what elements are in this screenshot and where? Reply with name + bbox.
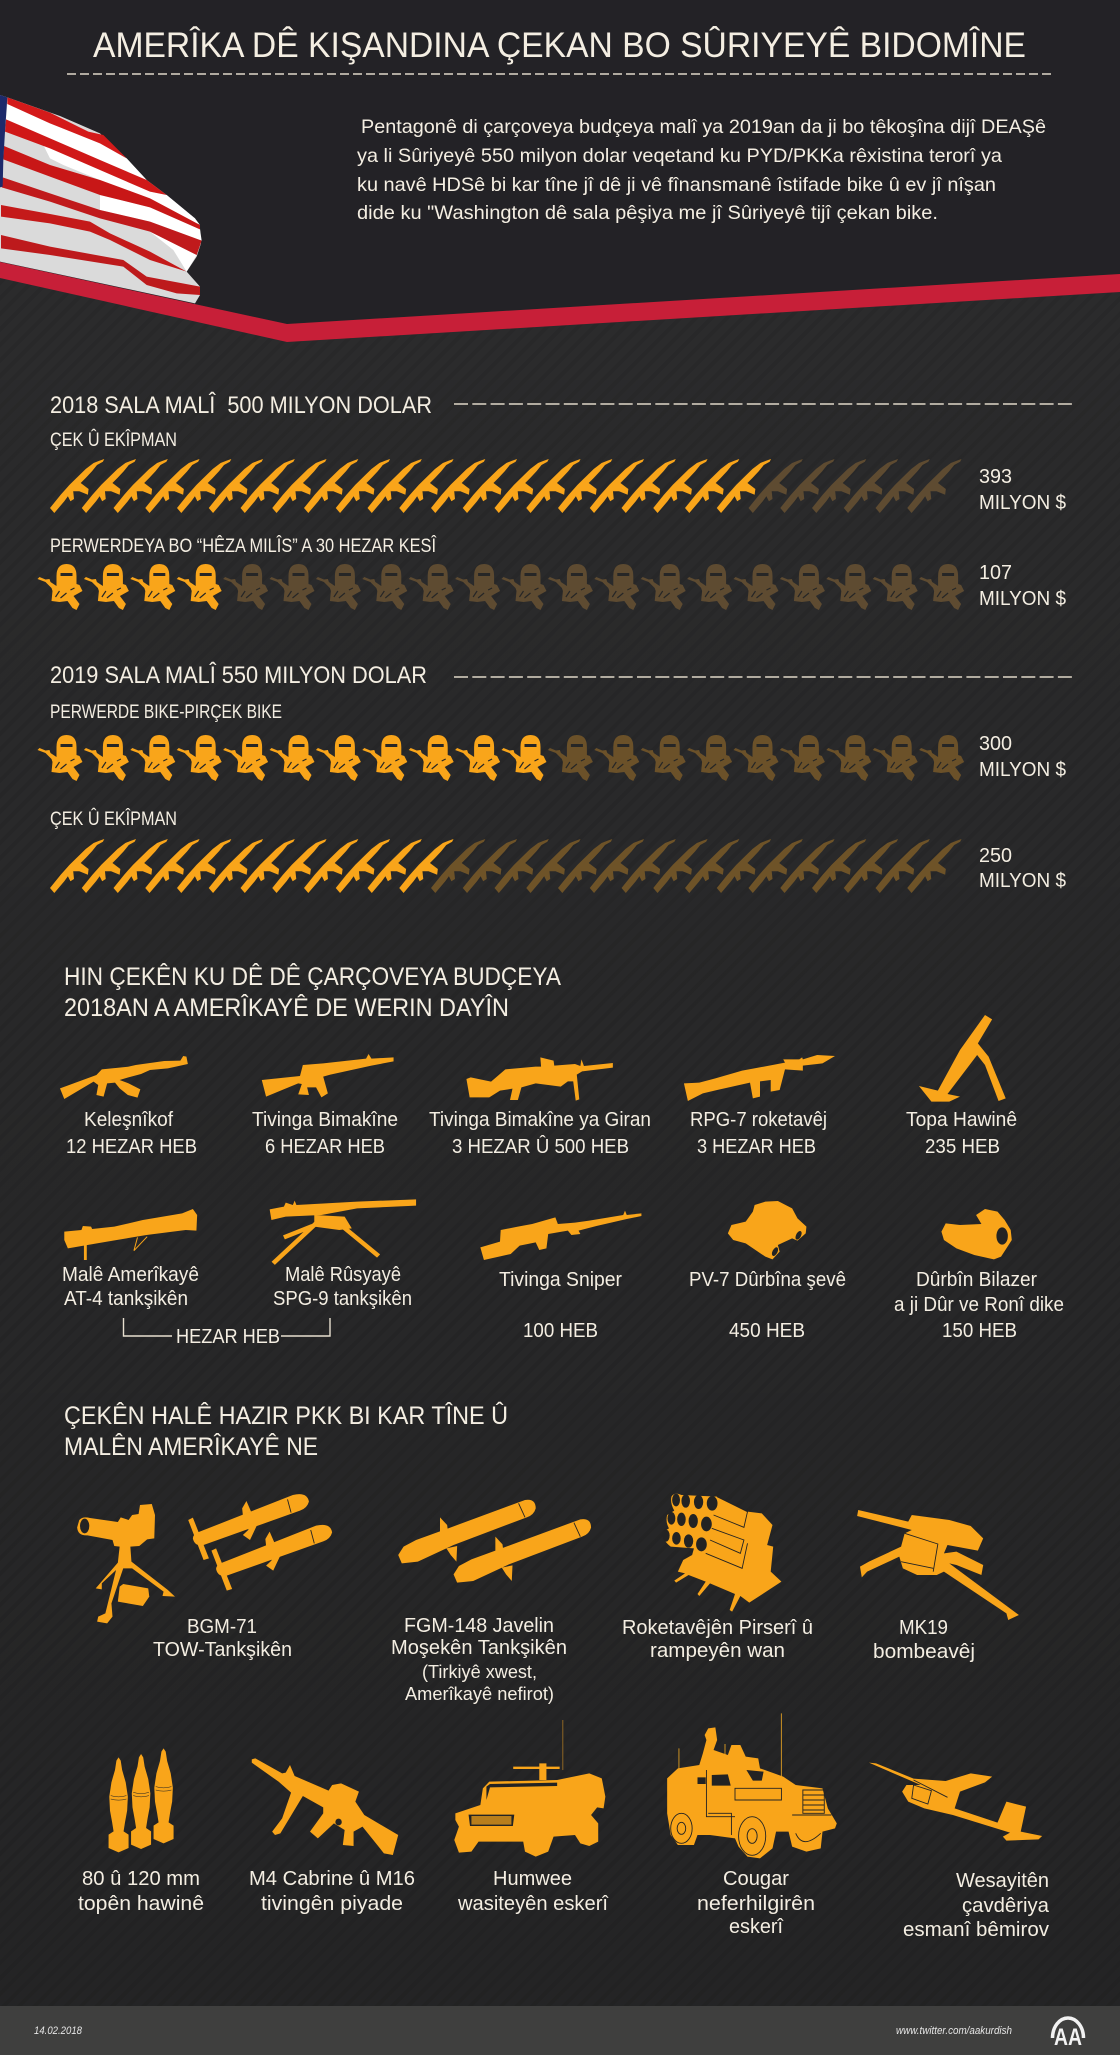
item: AT-4 xyxy=(62,1209,199,1310)
heading: 2018: 2018 SALA MALÎ 500 MILYON DOLAR xyxy=(50,392,432,419)
value: 393 million xyxy=(979,465,1067,514)
date: 14.02.2018 xyxy=(34,2025,83,2037)
intro text: dide ku "Washington dê sala pêşiya me jî Sûriyeyê tijî çekan bike. xyxy=(357,202,938,224)
item: reconnaissance drone xyxy=(869,1763,1050,1941)
item: RPG-7: 3 HEZAR HEB xyxy=(697,1135,816,1158)
value: 107 million xyxy=(979,561,1067,610)
value: 107 million: 107 xyxy=(979,561,1012,584)
title: AMERÎKA DÊ KIŞANDINA ÇEKAN BO SÛRIYEYÊ BIDOMÎNE xyxy=(93,26,1026,65)
row label: training: PERWERDE BIKE-PIRÇEK BIKE xyxy=(50,702,282,723)
intro text: Pentagonê di çarçoveya budçeya malî ya 2019an da ji bo têkoşîna dijî DEAŞê xyxy=(361,116,1046,138)
item: sniper rifle: 100 HEB xyxy=(523,1319,598,1342)
item: AT-4: AT-4 tankşikên xyxy=(64,1287,188,1310)
item: Kalashnikov: Keleşnîkof xyxy=(84,1108,173,1131)
pictogram: 250 million rifles xyxy=(50,839,962,893)
row label: militia training: PERWERDEYA BO “HÊZA MILÎS” A 30 HEZAR KESÎ xyxy=(50,535,437,557)
item: Cougar MRAP: Cougar xyxy=(723,1867,789,1890)
item: M4 carbine: tivingên piyade xyxy=(261,1892,403,1915)
value: 107 million: MILYON $ xyxy=(979,587,1067,610)
value: 393 million: 393 xyxy=(979,465,1012,488)
item: reconnaissance drone: çavdêriya xyxy=(962,1894,1050,1917)
item: SPG-9: Malê Rûsyayê xyxy=(285,1263,401,1286)
item: multiple rocket launcher: rampeyên wan xyxy=(650,1639,785,1662)
value: 300 million: MILYON $ xyxy=(979,758,1067,781)
item: Cougar MRAP: neferhilgirên xyxy=(697,1892,815,1915)
heading: weapons PKK already uses xyxy=(64,1401,508,1461)
item: laser sight: Dûrbîn Bilazer xyxy=(916,1268,1037,1291)
item: Kalashnikov xyxy=(60,1056,197,1158)
value: 250 million: MILYON $ xyxy=(979,869,1067,892)
item: mortar shells xyxy=(78,1748,204,1915)
heading: weapons PKK already uses: MALÊN AMERÎKAYÊ NE xyxy=(64,1432,318,1461)
footer bar xyxy=(0,2006,1120,2055)
red ribbon xyxy=(0,262,1120,342)
item: BGM-71 TOW: BGM-71 xyxy=(187,1615,257,1638)
item: Humvee: wasiteyên eskerî xyxy=(457,1892,609,1915)
item: BGM-71 TOW: TOW-Tankşikên xyxy=(153,1638,292,1661)
item: Cougar MRAP xyxy=(667,1713,837,1938)
item: Humvee xyxy=(454,1720,609,1915)
pictogram: 107 million militia xyxy=(38,564,964,610)
item: MK19 grenade launcher: MK19 xyxy=(899,1616,948,1639)
row label: equipment: ÇEK Û EKÎPMAN xyxy=(50,429,177,451)
item: FGM-148 Javelin: (Tirkiyê xwest, xyxy=(422,1662,537,1682)
item: mortar: 235 HEB xyxy=(925,1135,1000,1158)
item: reconnaissance drone: Wesayitên xyxy=(956,1869,1049,1892)
bracket label: thousand units: HEZAR HEB xyxy=(176,1325,280,1348)
heading: 2019: 2019 SALA MALÎ 550 MILYON DOLAR xyxy=(50,662,427,689)
bracket label: thousand units xyxy=(124,1318,330,1348)
item: RPG-7: RPG-7 roketavêj xyxy=(690,1108,827,1131)
item: M4 carbine: M4 Cabrine û M16 xyxy=(249,1867,415,1890)
icon: US flag xyxy=(0,95,202,303)
item: multiple rocket launcher xyxy=(622,1494,813,1662)
item: Kalashnikov: 12 HEZAR HEB xyxy=(66,1135,197,1158)
item: assault rifle: Tivinga Bimakîne xyxy=(252,1108,398,1131)
item: FGM-148 Javelin: Amerîkayê nefirot) xyxy=(405,1684,554,1704)
item: mortar xyxy=(906,1015,1017,1158)
value: 250 million: 250 xyxy=(979,844,1012,867)
item: RPG-7 xyxy=(684,1055,835,1158)
item: MK19 grenade launcher: bombeavêj xyxy=(873,1640,975,1663)
row label: equipment 2019: ÇEK Û EKÎPMAN xyxy=(50,808,177,830)
item: BGM-71 TOW xyxy=(77,1494,332,1661)
item: FGM-148 Javelin: FGM-148 Javelin xyxy=(404,1614,554,1637)
item: SPG-9: SPG-9 tankşikên xyxy=(273,1287,412,1310)
item: mortar shells: 80 û 120 mm xyxy=(82,1867,200,1890)
intro text: ku navê HDSê bi kar tîne jî dê ji vê fînansmanê îstifade bike û ev jî nîşan xyxy=(357,174,996,196)
item: night binoculars: 450 HEB xyxy=(729,1319,805,1342)
value: 300 million: 300 xyxy=(979,732,1012,755)
item: assault rifle: 6 HEZAR HEB xyxy=(265,1135,385,1158)
item: mortar shells: topên hawinê xyxy=(78,1892,204,1915)
item: Cougar MRAP: eskerî xyxy=(729,1915,784,1938)
icon: AA logo xyxy=(1052,2018,1084,2051)
item: laser sight xyxy=(894,1209,1064,1342)
heading: weapons PKK already uses: ÇEKÊN HALÊ HAZIR PKK BI KAR TÎNE Û xyxy=(64,1401,508,1430)
source url: www.twitter.com/aakurdish xyxy=(896,2025,1012,2037)
value: 393 million: MILYON $ xyxy=(979,491,1067,514)
heading: weapons in 2018 budget: 2018AN A AMERÎKAYÊ DE WERIN DAYÎN xyxy=(64,993,509,1022)
section: 2019 budget xyxy=(38,662,1076,893)
section: 2018 budget xyxy=(38,392,1076,610)
item: AT-4: Malê Amerîkayê xyxy=(62,1263,199,1286)
heading: weapons in 2018 budget: HIN ÇEKÊN KU DÊ DÊ ÇARÇOVEYA BUDÇEYA xyxy=(64,962,561,991)
item: night binoculars xyxy=(689,1201,846,1342)
pictogram: 393 million rifles xyxy=(50,459,962,513)
value: 300 million xyxy=(979,732,1067,781)
item: reconnaissance drone: esmanî bêmirov xyxy=(903,1918,1050,1941)
item: night binoculars: PV-7 Dûrbîna şevê xyxy=(689,1268,846,1291)
icon: AA logo: AA xyxy=(1054,2024,1082,2051)
intro text xyxy=(357,116,1046,224)
item: SPG-9 xyxy=(270,1199,416,1310)
item: heavy machine gun xyxy=(429,1057,651,1158)
heading: weapons in 2018 budget xyxy=(64,962,561,1022)
item: assault rifle xyxy=(252,1054,398,1158)
intro text: ya li Sûriyeyê 550 milyon dolar veqetand ku PYD/PKKa rêxistina terorî ya xyxy=(357,145,1002,167)
item: laser sight: 150 HEB xyxy=(942,1319,1017,1342)
item: heavy machine gun: Tivinga Bimakîne ya Giran xyxy=(429,1108,651,1131)
pictogram: 300 million militia xyxy=(38,735,964,781)
value: 250 million xyxy=(979,844,1067,892)
item: sniper rifle xyxy=(480,1211,641,1342)
item: M4 carbine xyxy=(249,1758,415,1915)
item: mortar: Topa Hawinê xyxy=(906,1108,1017,1131)
item: multiple rocket launcher: Roketavêjên Pirserî û xyxy=(622,1616,813,1639)
item: sniper rifle: Tivinga Sniper xyxy=(499,1268,622,1291)
item: laser sight: a ji Dûr ve Ronî dike xyxy=(894,1293,1064,1316)
item: heavy machine gun: 3 HEZAR Û 500 HEB xyxy=(452,1135,629,1158)
item: FGM-148 Javelin xyxy=(391,1500,591,1704)
item: Humvee: Humwee xyxy=(493,1867,572,1890)
item: MK19 grenade launcher xyxy=(857,1510,1019,1663)
item: FGM-148 Javelin: Moşekên Tankşikên xyxy=(391,1636,567,1659)
